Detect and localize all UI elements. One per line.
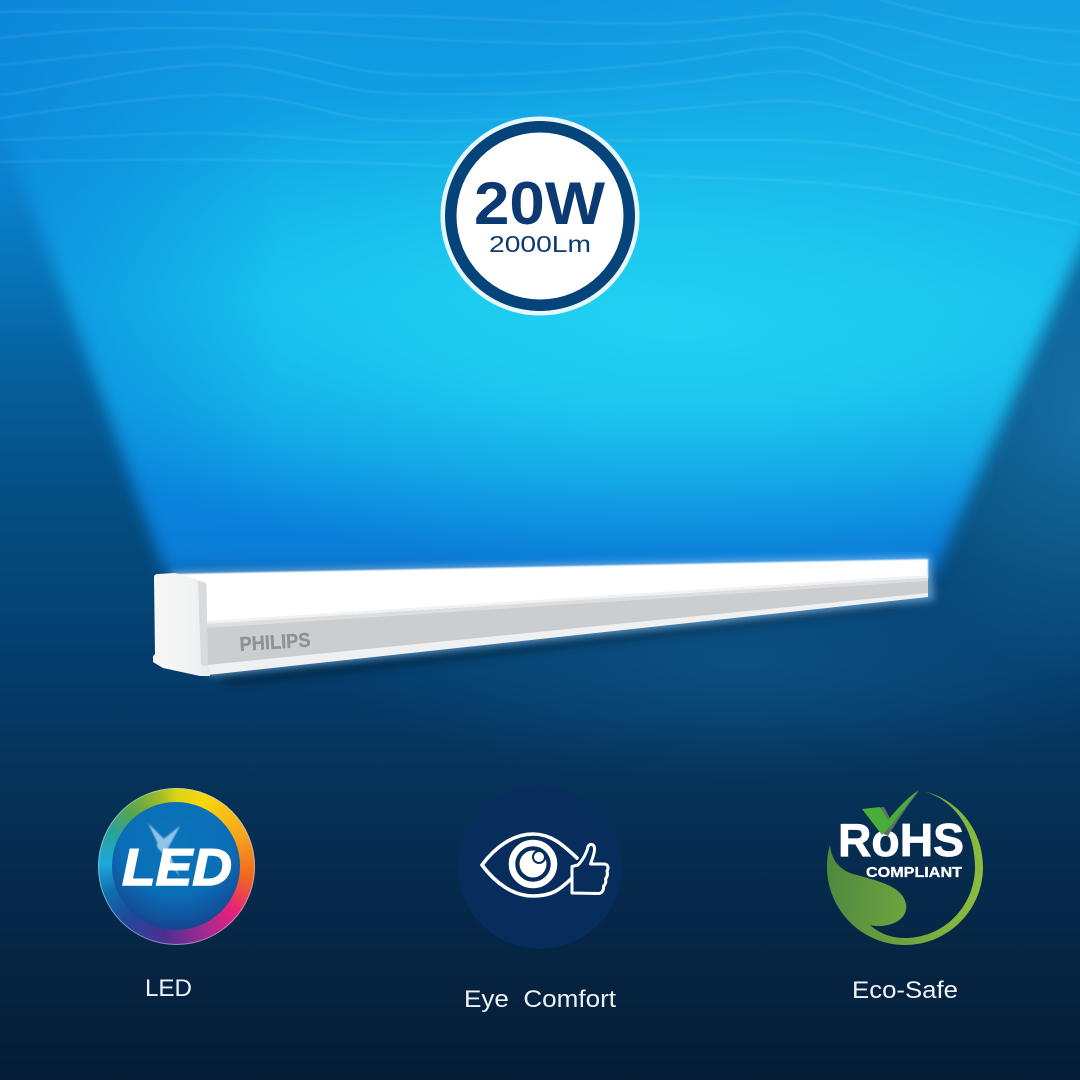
check mark	[864, 791, 919, 836]
label: Eye Comfort: Eye Comfort	[464, 986, 616, 1013]
RoHS text: RoHS	[838, 814, 964, 866]
iris	[512, 843, 554, 885]
LED wordmark: LED	[122, 839, 232, 897]
icon: LED	[98, 788, 255, 945]
COMPLIANT text: COMPLIANT	[866, 864, 962, 881]
brand name on bar: PHILIPS	[239, 630, 311, 656]
label: Eco-Safe: Eco-Safe	[852, 977, 958, 1004]
end cap	[153, 573, 210, 676]
wattage value: 20W	[474, 170, 605, 237]
star glint	[148, 823, 180, 877]
thumbs up	[572, 844, 608, 894]
green swoosh and leaf	[827, 791, 983, 945]
eye outline	[482, 834, 577, 896]
decorative floor shadow	[212, 603, 900, 687]
lumen value: 2000Lm	[489, 231, 591, 257]
label: LED: LED	[145, 975, 192, 1002]
